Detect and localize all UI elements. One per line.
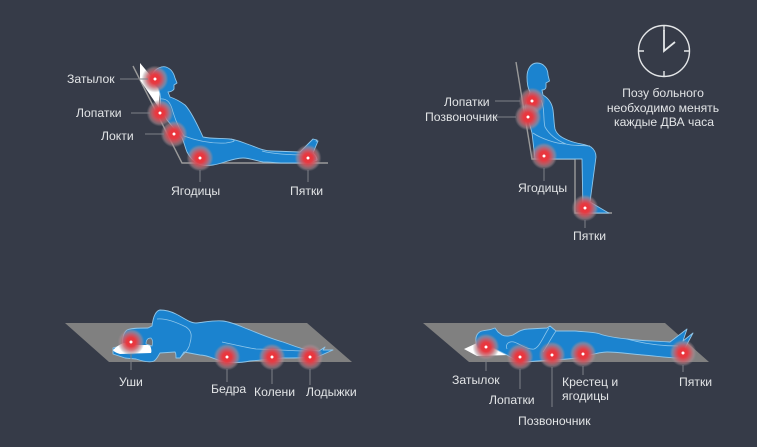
callout: change position text: Позу больного	[622, 86, 704, 100]
label: Лопатки: Лопатки	[76, 106, 122, 120]
label: Затылок: Затылок	[452, 373, 500, 387]
mat	[65, 323, 352, 362]
label: Крестец и ягодицы: ягодицы	[562, 389, 609, 403]
headrest pillow	[140, 63, 160, 108]
side-lying body	[113, 310, 333, 363]
figure: seated patient	[425, 62, 612, 243]
label: Лопатки: Лопатки	[444, 95, 490, 109]
label: Пятки: Пятки	[679, 375, 712, 389]
icon: clock	[638, 25, 690, 77]
label: Крестец и ягодицы: Крестец и	[562, 375, 618, 389]
mat	[423, 323, 709, 362]
label: Ягодицы: Ягодицы	[518, 181, 567, 195]
callout: change position text: каждые ДВА часа	[614, 115, 714, 129]
label: Позвоночник: Позвоночник	[518, 414, 591, 428]
label: Крестец и ягодицы	[562, 375, 618, 403]
leader lines	[120, 79, 308, 182]
label: Пятки: Пятки	[290, 184, 323, 198]
figure: patient lying on back	[423, 323, 712, 428]
leader lines	[131, 354, 310, 385]
leg contour	[262, 151, 304, 155]
label: Локти: Локти	[101, 129, 134, 143]
callout: change position text: необходимо менять	[607, 101, 719, 115]
label: Лодыжки: Лодыжки	[306, 385, 357, 399]
label: Колени: Колени	[254, 385, 295, 399]
pillow	[464, 343, 510, 356]
pillow	[113, 343, 151, 354]
figure: patient lying on side	[65, 310, 357, 399]
label: Позвоночник: Позвоночник	[425, 110, 498, 124]
label: Уши: Уши	[119, 375, 143, 389]
callout: change position text	[607, 86, 719, 129]
arm contour	[157, 319, 310, 358]
label: Затылок: Затылок	[67, 72, 115, 86]
arm and thigh contours	[533, 100, 590, 146]
chair frame	[516, 62, 612, 213]
supine body	[476, 326, 693, 362]
seated body	[525, 63, 609, 213]
figure: reclining patient	[67, 63, 328, 198]
hand gap	[146, 338, 153, 346]
pressure spots	[514, 88, 598, 222]
pressure spots	[118, 328, 324, 370]
label: Пятки: Пятки	[573, 229, 606, 243]
arm contour	[160, 99, 234, 143]
reclining body	[152, 67, 318, 165]
pressure spots	[142, 66, 322, 172]
leader lines	[492, 101, 585, 228]
label: Бедра: Бедра	[211, 382, 246, 396]
arm and leg contours	[506, 328, 678, 352]
label: Лопатки: Лопатки	[489, 393, 535, 407]
pressure spots	[472, 334, 696, 370]
backrest frame	[133, 66, 328, 163]
label: Ягодицы: Ягодицы	[171, 184, 220, 198]
leader lines	[486, 359, 683, 407]
